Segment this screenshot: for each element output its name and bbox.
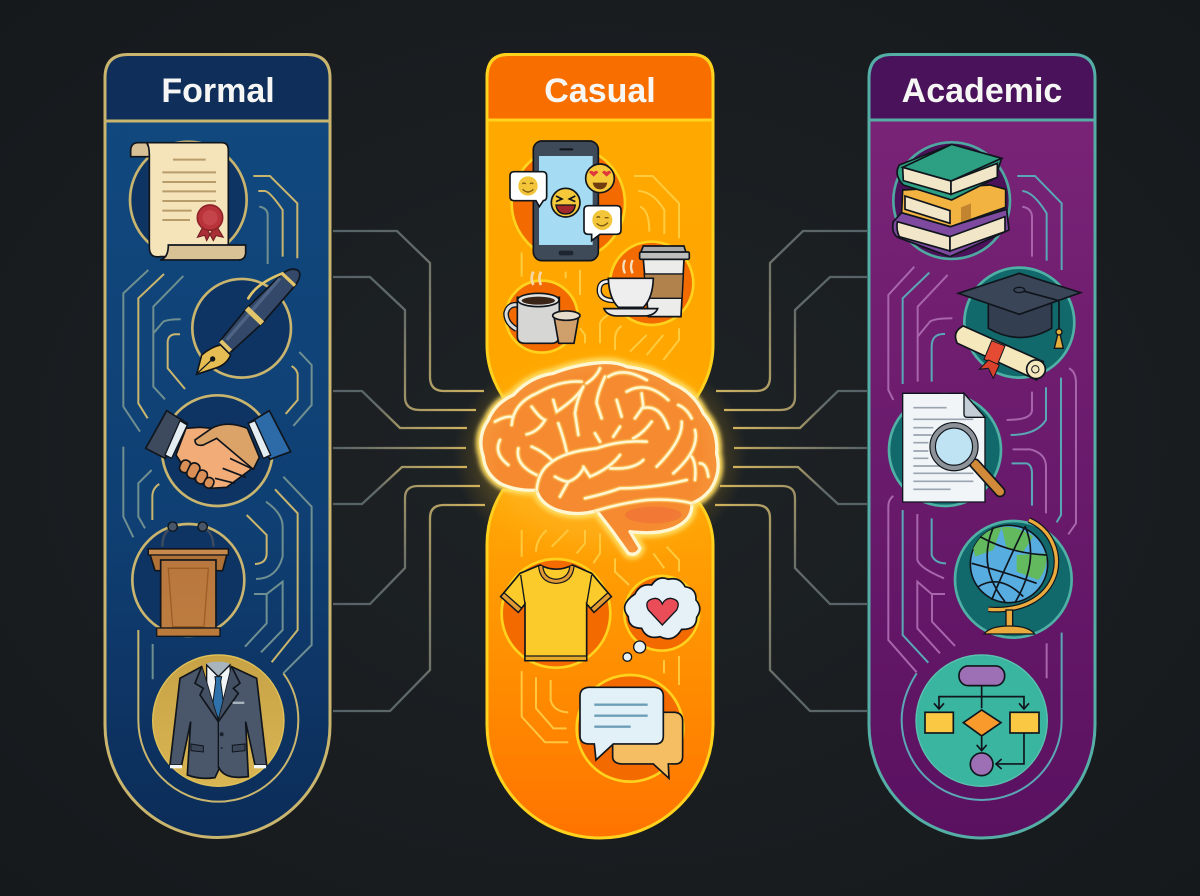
icon: coffee cup and takeaway cup bbox=[599, 242, 693, 325]
icon: globe bbox=[955, 520, 1072, 638]
icon: scroll certificate bbox=[130, 142, 247, 260]
connectors: right side bbox=[715, 231, 867, 711]
heading: Casual: Casual bbox=[544, 72, 656, 110]
icon: t-shirt bbox=[501, 559, 611, 668]
icon: graduation cap and diploma bbox=[955, 268, 1081, 380]
emoji bubble left bbox=[510, 172, 547, 207]
panel: casual bbox=[487, 54, 713, 838]
brain folds bbox=[495, 368, 708, 511]
emoji bubble right bbox=[584, 206, 621, 241]
emoji laughing bbox=[551, 188, 580, 217]
panel: academic bbox=[869, 54, 1095, 838]
icon: stack of books bbox=[893, 142, 1010, 259]
icon: handshake bbox=[146, 395, 291, 506]
icon: thought cloud with heart bbox=[623, 576, 700, 661]
icon: glowing brain bbox=[453, 342, 747, 568]
circuit traces: formal lower bbox=[123, 447, 312, 802]
icon: flowchart bbox=[916, 655, 1047, 786]
icon: chat bubbles bbox=[577, 675, 683, 782]
circuit traces: academic upper bbox=[888, 176, 1076, 450]
heading: Formal: Formal bbox=[161, 72, 275, 110]
icon: podium bbox=[132, 522, 244, 636]
circuit traces: formal upper bbox=[123, 176, 312, 432]
circuit traces: casual lower bbox=[522, 530, 679, 742]
icon: phone with emojis bbox=[510, 141, 625, 261]
circuit traces: academic lower bbox=[888, 440, 1076, 800]
icon: coffee mug and small cup bbox=[506, 272, 580, 353]
emoji heart eyes bbox=[586, 164, 614, 193]
connectors: left side bbox=[333, 231, 485, 711]
heading: Academic: Academic bbox=[902, 72, 1062, 110]
icon: document with magnifying glass bbox=[889, 393, 1001, 506]
circuit traces: casual upper bbox=[522, 176, 679, 360]
icon: fountain pen bbox=[192, 269, 300, 378]
panel: formal bbox=[105, 54, 330, 838]
icon: suit jacket bbox=[153, 655, 284, 786]
